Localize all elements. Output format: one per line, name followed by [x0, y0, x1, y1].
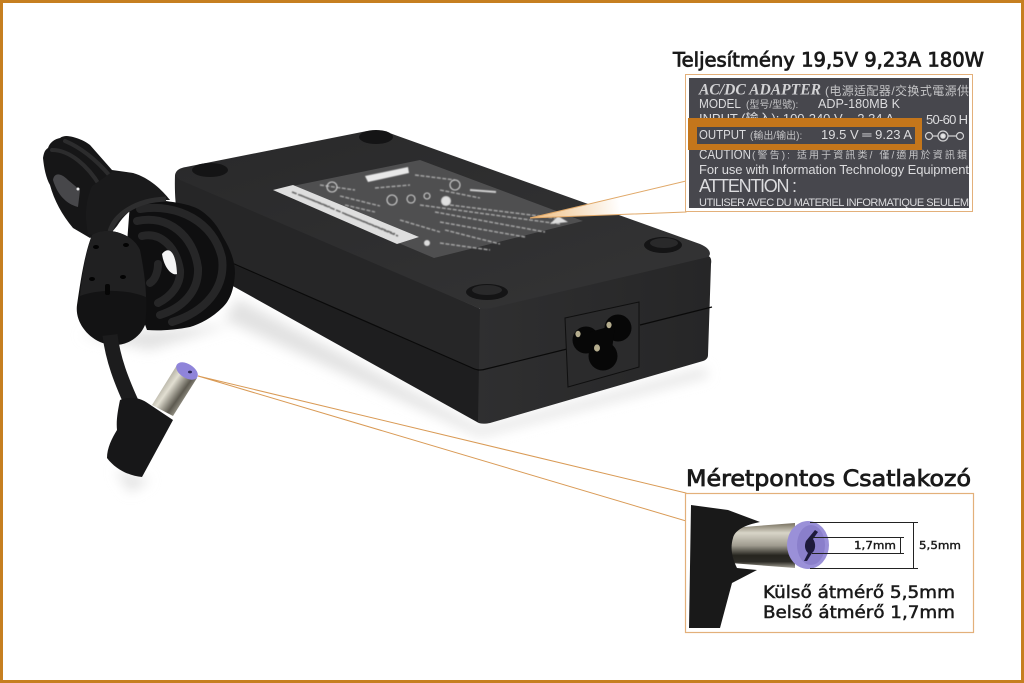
gap in upper loop: [53, 174, 80, 207]
callout wedge to connector: [198, 376, 686, 521]
adapter body: [175, 130, 712, 424]
upper band of side face: [175, 175, 483, 372]
output highlight box: [688, 118, 922, 150]
panel: connector detail: [686, 494, 974, 632]
small plug: [107, 359, 201, 477]
power socket: [565, 302, 639, 387]
heading: connector: Méretpontos Csatlakozó: [686, 467, 971, 492]
dimension lines: [810, 522, 918, 569]
cable coil: [43, 136, 235, 330]
metal barrel: [730, 523, 795, 568]
dimension 1,7mm: 1,7mm: [854, 539, 896, 552]
velcro strap: [86, 172, 170, 238]
label text lines: ADP-180MB K: [818, 96, 900, 111]
panel: specification label: [686, 74, 972, 212]
outer diameter text: Külső átmérő 5,5mm: [763, 583, 955, 602]
front face: [478, 256, 711, 424]
sticker: [273, 160, 583, 258]
label text lines: INPUT (输入): 100-240 V ~ 2.34 A: [699, 111, 894, 126]
ferrite core: [77, 231, 146, 345]
label text lines: (警告): 适用于資訊类/ 僅/適用於資訊類: [752, 148, 967, 162]
dimension 5,5mm: 5,5mm: [919, 539, 961, 552]
label text lines: (型号/型號):: [746, 98, 798, 111]
left side face: [175, 175, 488, 424]
product shadows: [80, 298, 708, 492]
sticker printed marks: [320, 167, 568, 250]
icon: polarity symbol: [926, 131, 964, 141]
heading: power rating: Teljesítmény 19,5V 9,23A 180W: [672, 48, 984, 72]
label text lines: UTILISER AVEC DU MATERIEL INFORMATIQUE SEULEM: [699, 197, 969, 209]
feet: [192, 163, 228, 177]
label text lines: MODEL: [699, 96, 741, 111]
output text: [699, 127, 912, 142]
label text lines: For use with Information Technology Equipment: [699, 162, 969, 177]
upper loop strands: [52, 141, 110, 186]
coil strands: [137, 208, 222, 322]
purple tip: [787, 521, 829, 569]
label text lines: CAUTION: [699, 146, 751, 162]
inner diameter text: Belső átmérő 1,7mm: [763, 603, 955, 622]
gap in coil: [162, 250, 177, 274]
cable to plug: [110, 335, 131, 402]
label text lines: [698, 82, 969, 209]
callout wedge to specification label: [530, 181, 686, 218]
output text: OUTPUT: [699, 127, 746, 142]
white strip: [273, 185, 419, 244]
strip text bars: [292, 192, 398, 236]
label text lines: 50-60 H: [926, 112, 968, 127]
label text lines: ATTENTION :: [699, 176, 797, 196]
label text lines: (电源适配器/交换式電源供: [825, 83, 969, 98]
connector boot: [689, 505, 760, 628]
seam line: [232, 263, 712, 370]
output text: 19.5 V ═ 9.23 A: [821, 127, 912, 142]
output text: (輸出/输出):: [750, 129, 802, 142]
label text lines: AC/DC ADAPTER: [698, 82, 821, 98]
upper coil loop: [43, 136, 170, 238]
top face: [175, 131, 710, 309]
coil mass: [125, 200, 235, 330]
